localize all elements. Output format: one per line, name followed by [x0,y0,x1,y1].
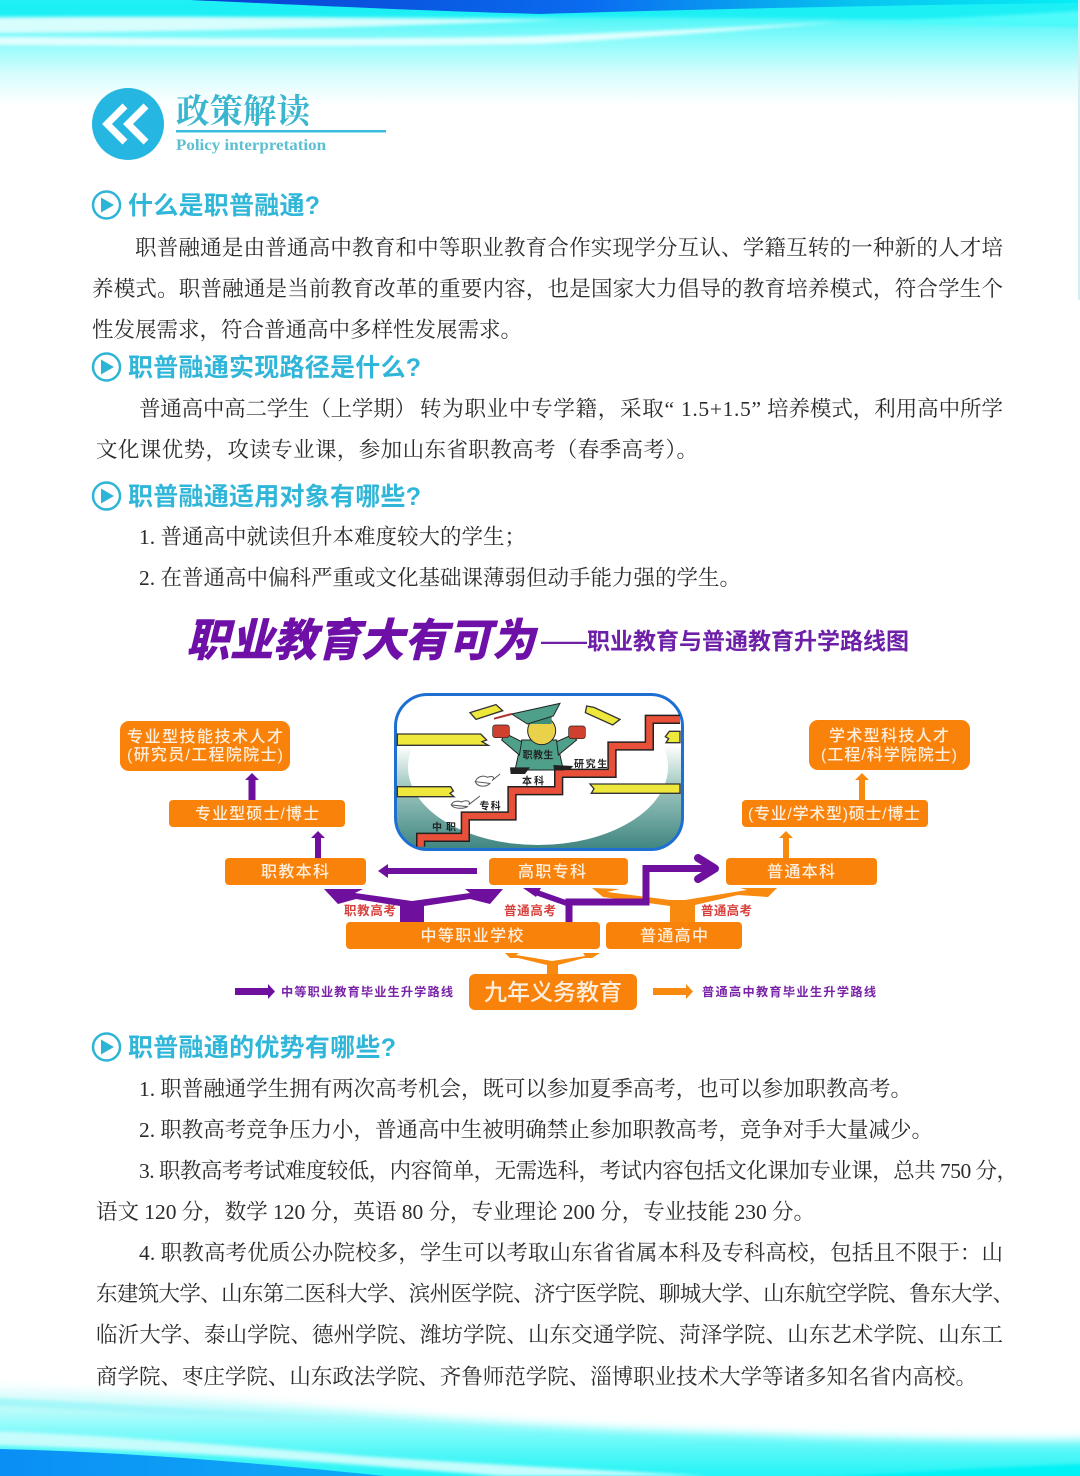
list: 1. 普通高中就读但升本难度较大的学生； [139,525,526,549]
box: higher vocational college: 高职专科 [518,863,586,881]
box: compulsory education: 九年义务教育 [484,979,622,1005]
heading with play icon: 职普融通适用对象有哪些? [128,483,421,511]
paragraph: 文化课优势，攻读专业课，参加山东省职教高考（春季高考）。 [96,438,698,463]
purple arrow to vocational undergraduate [378,864,477,878]
paragraph: 养模式。职普融通是当前教育改革的重要内容，也是国家大力倡导的教育培养模式，符合学生个 [92,277,1003,302]
box: vocational undergraduate [225,858,366,885]
box: skilled talents: (研究员/工程院院士) [127,745,283,764]
paragraph: 普通高中高二学生（上学期） [139,397,416,421]
paragraph: 性发展需求，符合普通高中多样性发展需求。 [92,318,522,343]
stair labels: 职教生 [523,748,553,761]
section: pathway [93,354,1003,463]
list of advantages: 3. 职教高考考试难度较低，内容简单，无需选科，考试内容包括文化课加专业课，总共 750 分， [139,1159,1018,1184]
box: general undergraduate: 普通本科 [767,863,835,881]
top wave decoration [0,0,1080,300]
box: professional master and doctor [169,800,345,827]
box: academic talents: 学术型科技人才 [829,726,949,745]
label: general exam centre: 普通高考 [504,903,556,918]
student figure [493,703,585,774]
box: professional or academic master and doctor [742,800,928,827]
bottom wave decoration [0,1385,1080,1476]
box: general high school [606,922,742,949]
purple vocational fork arrow [324,889,503,922]
box: general high school: 普通高中 [640,927,708,945]
heading: 政策解读: 政策解读 [176,93,311,131]
legend: general route: 普通高中教育毕业生升学路线 [702,984,876,999]
section: target group [93,482,741,590]
box: academic talents: (工程/科学院院士) [821,745,957,764]
stairs [421,719,680,847]
box: higher vocational college [489,858,628,885]
section header: policy interpretation [92,88,386,160]
box: secondary vocational school [346,922,600,949]
orange exam fork arrow [592,888,777,922]
orange compulsory education fork arrow [505,953,600,974]
list of advantages: 临沂大学、泰山学院、德州学院、潍坊学院、山东交通学院、菏泽学院、山东艺术学院、山东工 [96,1323,1003,1347]
illustration: student climbing stairs: 中职 [432,821,456,834]
purple route arrow to general undergraduate [523,858,715,922]
box: professional master and doctor: 专业型硕士/博士 [195,805,319,823]
legend: vocational route: 中等职业教育毕业生升学路线 [281,984,453,999]
list of advantages: 1. 职普融通学生拥有两次高考机会，既可以参加夏季高考，也可以参加职教高考。 [139,1077,912,1102]
list of advantages: 东建筑大学、山东第二医科大学、滨州医学院、济宁医学院、聊城大学、山东航空学院、鲁东大学、 [96,1282,1014,1306]
main title: 职业教育大有可为 [186,615,539,666]
box: secondary vocational school: 中等职业学校 [420,926,524,945]
heading with play icon: 什么是职普融通? [128,192,320,220]
broken yellow planks [397,705,680,797]
paragraph [92,236,1003,343]
heading with play icon: 职普融通实现路径是什么? [128,354,421,382]
subtitle: ——职业教育与普通教育升学路线图 [541,628,909,654]
chart: study route diagram [120,689,970,1010]
box: professional or academic master and doctor: (专业/学术型)硕士/博士 [748,804,920,823]
box: skilled talents: 专业型技能技术人才 [127,728,283,746]
paragraph [96,397,1003,463]
purple arrow up to professional master [311,831,325,858]
list: 2. 在普通高中偏科严重或文化基础课薄弱但动手能力强的学生。 [139,566,741,590]
box: skilled talents [120,721,290,771]
motion clouds [451,774,500,808]
purple arrow up to skilled talents [245,773,259,800]
orange arrow up to academic talents [855,773,869,800]
icon: double chevron circle [92,88,164,160]
diagram title [186,615,909,666]
box: academic talents [809,720,970,770]
list of advantages: 商学院、枣庄学院、山东政法学院、齐鲁师范学院、淄博职业技术大学等诸多知名省内高校。 [96,1365,977,1389]
section: advantages [93,1034,1018,1389]
paragraph: 培养模式，利用高中所学 [767,397,1003,422]
paragraph: 1.5+1.5” [681,397,761,421]
list of advantages [96,1077,1018,1389]
box: general undergraduate [726,858,877,885]
heading with play icon: 职普融通的优势有哪些? [128,1034,396,1062]
paragraph: 职普融通是由普通高中教育和中等职业教育合作实现学分互认、学籍互转的一种新的人才培 [135,236,1003,260]
label: general exam right: 普通高考 [701,903,752,918]
header rule [176,130,386,132]
illustration: student climbing stairs: 研究生 [574,757,607,770]
illustration: student climbing stairs: 专科 [479,799,501,812]
list of advantages: 语文 120 分，数学 120 分，英语 80 分，专业理论 200 分，专业技能 230 分。 [96,1200,815,1225]
illustration: student climbing stairs [396,689,682,850]
list of advantages: 2. 职教高考竞争压力小，普通高中生被明确禁止参加职教高考，竞争对手大量减少。 [139,1118,933,1143]
paragraph: 转为职业中专学籍，采取“ [420,397,674,422]
section: what is it [92,192,1003,343]
list [139,525,741,590]
list of advantages: 4. 职教高考优质公办院校多，学生可以考取山东省省属本科及专科高校，包括且不限于：山 [139,1241,1003,1266]
illustration: student climbing stairs: 本科 [522,775,544,788]
orange arrow up to master [779,831,793,858]
box: vocational undergraduate: 职教本科 [261,863,329,881]
box: compulsory education [469,974,637,1010]
label: vocational exam: 职教高考 [344,903,396,918]
subheading: Policy interpretation: Policy interpretation [176,137,326,154]
